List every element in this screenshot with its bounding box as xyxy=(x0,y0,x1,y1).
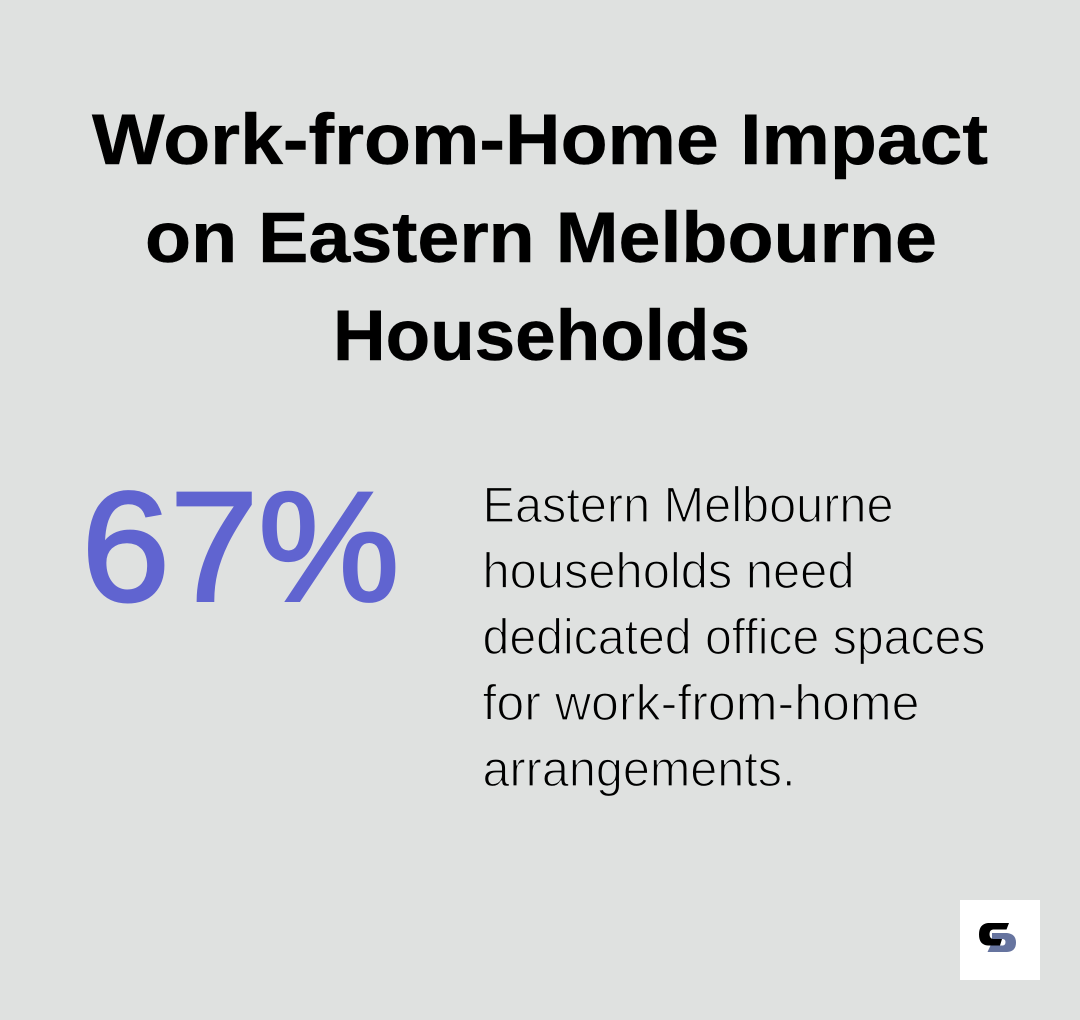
description text: for work-from-home xyxy=(482,675,920,731)
title xyxy=(92,101,988,376)
title: on Eastern Melbourne xyxy=(145,199,937,278)
big statistic: 67%: 67% xyxy=(82,460,399,634)
description text: households need xyxy=(482,543,854,599)
description text: Eastern Melbourne xyxy=(482,477,894,533)
title: Work-from-Home Impact xyxy=(92,101,988,180)
description text: arrangements. xyxy=(482,741,796,797)
logo badge xyxy=(960,900,1040,980)
description text xyxy=(482,477,986,797)
description text: dedicated office spaces xyxy=(482,609,986,665)
title: Households xyxy=(333,297,750,376)
